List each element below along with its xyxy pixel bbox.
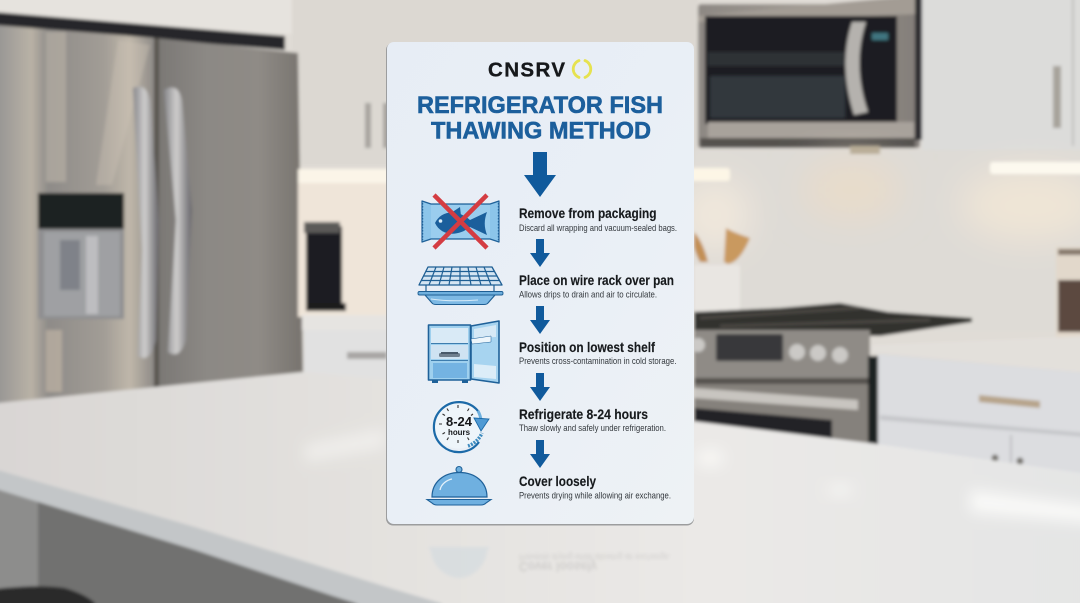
step 4 text: Refrigerate 8-24 hours [519,407,648,423]
sign reflection on counter: Prevents drying while allowing air exchange. [519,552,671,562]
step 5 text: Cover loosely [519,474,596,490]
icon: cloche cover [427,466,491,505]
icon: fish in crossed-out packaging [422,195,499,248]
step 4 text [519,407,666,433]
step 3 text [519,340,676,366]
water dispenser [38,193,124,319]
step 5 text: Prevents drying while allowing air exchange. [519,490,671,500]
arrow: step 4 to 5 [530,440,550,468]
icon: open refrigerator [428,321,499,383]
canister [1056,247,1080,340]
refrigerator [0,10,303,406]
step 3 text: Position on lowest shelf [519,340,655,356]
microwave [698,0,922,148]
left backsplash and coffee maker [298,169,390,380]
sign panel [386,42,694,526]
utensil crock [694,228,750,311]
right upper cabinet [922,0,1080,170]
title: THAWING METHOD [431,118,651,144]
backsplash [680,146,1080,330]
step 2 text: Allows drips to drain and air to circulate. [519,288,657,300]
step 1 text: Remove from packaging [519,206,656,222]
arrow: main down [524,152,556,197]
arrow: step 3 to 4 [530,373,550,401]
icon: 8-24 hours clock: 8-24 [446,415,472,429]
island base and stool [0,460,560,603]
sign reflection on counter: Cover loosely [519,559,597,575]
step 1 text [519,206,677,233]
icon: 8-24 hours clock: hours [448,427,470,437]
title [417,92,663,144]
step 2 text [519,273,674,300]
arrow: step 1 to 2 [530,239,550,267]
icon: wire rack over pan [418,267,503,304]
right base cabinets [872,335,1080,485]
stove [691,303,972,446]
step 1 text: Discard all wrapping and vacuum-sealed bags. [519,222,677,233]
upper cabinets above fridge [0,0,698,165]
title: REFRIGERATOR FISH [417,92,663,119]
logo ring [573,61,591,77]
countertop [0,372,1080,603]
step 5 text [519,474,671,500]
icon: 8-24 hours clock [434,400,489,452]
step 3 text: Prevents cross-contamination in cold storage. [519,355,676,366]
step 4 text: Thaw slowly and safely under refrigeration. [519,422,666,433]
arrow: step 2 to 3 [530,306,550,334]
brand logo: CNSRV [488,58,565,82]
step 2 text: Place on wire rack over pan [519,273,674,289]
sign reflection on counter [428,547,671,578]
